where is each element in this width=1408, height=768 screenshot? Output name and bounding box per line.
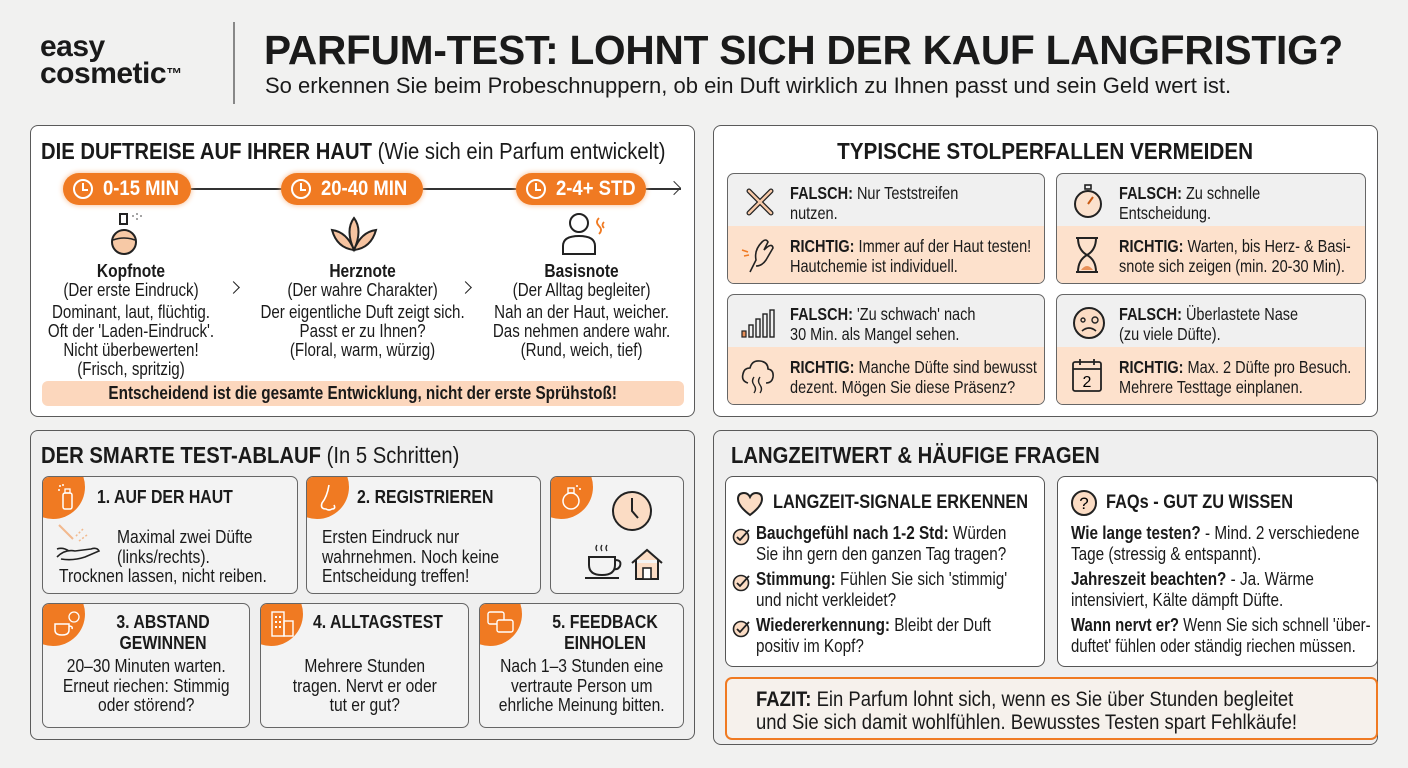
title: PARFUM-TEST: LOHNT SICH DER KAUF LANGFRISTIG? bbox=[264, 27, 1343, 73]
step 5: 5. FEEDBACK bbox=[552, 612, 658, 632]
panel: stolperfallen bbox=[713, 125, 1378, 417]
subtitle: So erkennen Sie beim Probeschnuppern, ob ein Duft wirklich zu Ihnen passt und sein Geld wert ist. bbox=[265, 73, 1231, 98]
icon: cup bbox=[585, 544, 622, 579]
icon: house bbox=[631, 548, 663, 580]
column: kopfnote: Nicht überbewerten! bbox=[63, 340, 199, 360]
panel: duftreise bbox=[30, 125, 695, 417]
banner: Entscheidend ist die gesamte Entwicklung, nicht der erste Sprühstoß! bbox=[109, 383, 617, 403]
card 4 bbox=[1056, 294, 1366, 405]
panel: langzeitwert bbox=[713, 430, 1378, 745]
card 3: dezent. Mögen Sie diese Präsenz? bbox=[790, 377, 1015, 397]
logo: easy bbox=[40, 30, 105, 63]
pill 0-15 bbox=[63, 173, 191, 205]
column: basisnote: (Der Alltag begleiter) bbox=[513, 280, 650, 300]
card 2: FALSCH: Zu schnelle bbox=[1119, 183, 1260, 203]
card 3 bbox=[727, 294, 1045, 405]
card 1: RICHTIG: Immer auf der Haut testen! bbox=[790, 236, 1031, 256]
step 5: ehrliche Meinung bitten. bbox=[499, 694, 664, 715]
card: langzeit-signale: und nicht verkleidet? bbox=[756, 590, 896, 610]
column: kopfnote bbox=[48, 260, 214, 379]
card 3: 30 Min. als Mangel sehen. bbox=[790, 324, 959, 344]
logo: cosmetic™ bbox=[40, 57, 182, 90]
step 3: GEWINNEN bbox=[119, 633, 207, 653]
card 3: RICHTIG: Manche Düfte sind bewusst bbox=[790, 357, 1037, 377]
fazit callout: FAZIT: Ein Parfum lohnt sich, wenn es Sie über Stunden begleitet bbox=[756, 688, 1293, 711]
card: langzeit-signale: LANGZEIT-SIGNALE ERKENNEN bbox=[773, 492, 1028, 513]
icon: perfume bottle bbox=[111, 213, 142, 255]
step 4: 4. ALLTAGSTEST bbox=[313, 612, 443, 632]
card: langzeit-signale: Wiedererkennung: Bleibt der Duft bbox=[756, 615, 991, 635]
column: kopfnote: (Frisch, spritzig) bbox=[77, 359, 185, 379]
card 4: FALSCH: Überlastete Nase bbox=[1119, 304, 1298, 324]
step 2: Entscheidung treffen! bbox=[322, 565, 469, 586]
timeline bbox=[59, 169, 681, 209]
step 1 bbox=[42, 476, 298, 594]
card 1: FALSCH: Nur Teststreifen bbox=[790, 183, 958, 203]
icon: person bbox=[562, 213, 605, 255]
step 5: vertraute Person um bbox=[511, 674, 652, 696]
card: faqs: Wann nervt er? Wenn Sie sich schnell 'über- bbox=[1071, 615, 1371, 635]
step 2: wahrnehmen. Noch keine bbox=[322, 546, 499, 566]
column: kopfnote: Kopfnote bbox=[97, 260, 165, 281]
step 4 bbox=[260, 603, 469, 728]
panel: test-ablauf bbox=[30, 430, 695, 740]
card: faqs: duftet' fühlen oder ständig riechen müssen. bbox=[1071, 636, 1356, 656]
step 5: Nach 1–3 Stunden eine bbox=[500, 655, 663, 676]
step 2 bbox=[306, 476, 541, 594]
column: basisnote: Nah an der Haut, weicher. bbox=[494, 302, 669, 322]
column: kopfnote: Oft der 'Laden-Eindruck'. bbox=[48, 321, 214, 341]
icon: lotus bbox=[330, 216, 378, 252]
pill 2-4: 2-4+ STD bbox=[556, 177, 636, 200]
column: kopfnote: Dominant, laut, flüchtig. bbox=[52, 302, 210, 322]
card: langzeit-signale: Stimmung: Fühlen Sie sich 'stimmig' bbox=[756, 569, 1007, 589]
column: herznote: Der eigentliche Duft zeigt sich. bbox=[260, 302, 465, 322]
card 4: Mehrere Testtage einplanen. bbox=[1119, 377, 1303, 397]
card 4: 2 bbox=[1083, 374, 1092, 391]
card 4: (zu viele Düfte). bbox=[1119, 324, 1221, 344]
fazit callout bbox=[725, 677, 1378, 740]
pill 2-4 bbox=[516, 173, 646, 205]
pill 0-15: 0-15 MIN bbox=[103, 177, 179, 200]
card: faqs bbox=[1057, 476, 1378, 667]
card: faqs: Wie lange testen? - Mind. 2 verschiedene bbox=[1071, 523, 1360, 543]
heading: DIE DUFTREISE AUF IHRER HAUT (Wie sich ein Parfum entwickelt) bbox=[41, 138, 666, 164]
heading: LANGZEITWERT & HÄUFIGE FRAGEN bbox=[731, 442, 1100, 468]
step 3: Erneut riechen: Stimmig bbox=[63, 674, 229, 696]
card: faqs: Jahreszeit beachten? - Ja. Wärme bbox=[1071, 569, 1314, 589]
heading: TYPISCHE STOLPERFALLEN VERMEIDEN bbox=[837, 138, 1253, 164]
pill 20-40: 20-40 MIN bbox=[321, 177, 407, 200]
card 1: nutzen. bbox=[790, 203, 838, 223]
fazit callout: und Sie sich damit wohlfühlen. Bewusstes Testen spart Fehlkäufe! bbox=[756, 711, 1297, 734]
card 3: FALSCH: 'Zu schwach' nach bbox=[790, 304, 975, 324]
icon: clock bbox=[612, 491, 652, 531]
card 2: snote sich zeigen (min. 20-30 Min). bbox=[1119, 256, 1345, 276]
card: langzeit-signale: positiv im Kopf? bbox=[756, 636, 864, 656]
card 1: Hautchemie ist individuell. bbox=[790, 256, 958, 276]
card: langzeit-signale: Sie ihn gern den ganzen Tag tragen? bbox=[756, 544, 1006, 564]
card: faqs: ? bbox=[1079, 494, 1089, 513]
column: basisnote: Das nehmen andere wahr. bbox=[493, 321, 670, 341]
column: herznote bbox=[260, 260, 465, 360]
column: basisnote: (Rund, weich, tief) bbox=[521, 340, 642, 360]
card: faqs: Tage (stressig & entspannt). bbox=[1071, 544, 1261, 564]
heading: DER SMARTE TEST-ABLAUF (In 5 Schritten) bbox=[41, 442, 459, 468]
step 4: tut er gut? bbox=[329, 694, 400, 715]
step 3: oder störend? bbox=[98, 694, 194, 715]
step 4: Mehrere Stunden bbox=[304, 655, 425, 676]
step 3: 20–30 Minuten warten. bbox=[67, 655, 225, 676]
card 4: RICHTIG: Max. 2 Düfte pro Besuch. bbox=[1119, 357, 1351, 377]
column: herznote: Herznote bbox=[329, 260, 396, 281]
column: basisnote: Basisnote bbox=[544, 260, 619, 281]
column: herznote: (Der wahre Charakter) bbox=[287, 280, 438, 300]
step 3: 3. ABSTAND bbox=[116, 612, 210, 632]
step 1: Maximal zwei Düfte bbox=[117, 526, 252, 547]
card: faqs: FAQs - GUT ZU WISSEN bbox=[1106, 492, 1293, 513]
column: herznote: Passt er zu Ihnen? bbox=[300, 321, 426, 341]
card 1 bbox=[727, 173, 1045, 284]
column: kopfnote: (Der erste Eindruck) bbox=[63, 280, 199, 300]
card 2: Entscheidung. bbox=[1119, 203, 1211, 223]
step 4: tragen. Nervt er oder bbox=[292, 674, 437, 696]
pill 20-40 bbox=[281, 173, 423, 205]
step 5 bbox=[479, 603, 684, 728]
logo bbox=[40, 30, 182, 90]
step 3 bbox=[42, 603, 250, 728]
step 1: (links/rechts). bbox=[117, 546, 210, 566]
step 1: 1. AUF DER HAUT bbox=[97, 487, 233, 507]
step icons card bbox=[550, 476, 684, 594]
column: herznote: (Floral, warm, würzig) bbox=[290, 340, 435, 360]
banner bbox=[42, 381, 684, 406]
step 2: Ersten Eindruck nur bbox=[322, 526, 459, 547]
step 1: Trocknen lassen, nicht reiben. bbox=[59, 565, 267, 586]
column: basisnote bbox=[493, 260, 670, 360]
step 2: 2. REGISTRIEREN bbox=[357, 487, 493, 507]
card: langzeit-signale bbox=[725, 476, 1045, 667]
card 2 bbox=[1056, 173, 1366, 284]
step 5: EINHOLEN bbox=[564, 633, 646, 653]
card: faqs: intensiviert, Kälte dämpft Düfte. bbox=[1071, 590, 1283, 610]
card: langzeit-signale: Bauchgefühl nach 1-2 Std: Würden bbox=[756, 523, 1006, 543]
card 2: RICHTIG: Warten, bis Herz- & Basi- bbox=[1119, 236, 1351, 256]
